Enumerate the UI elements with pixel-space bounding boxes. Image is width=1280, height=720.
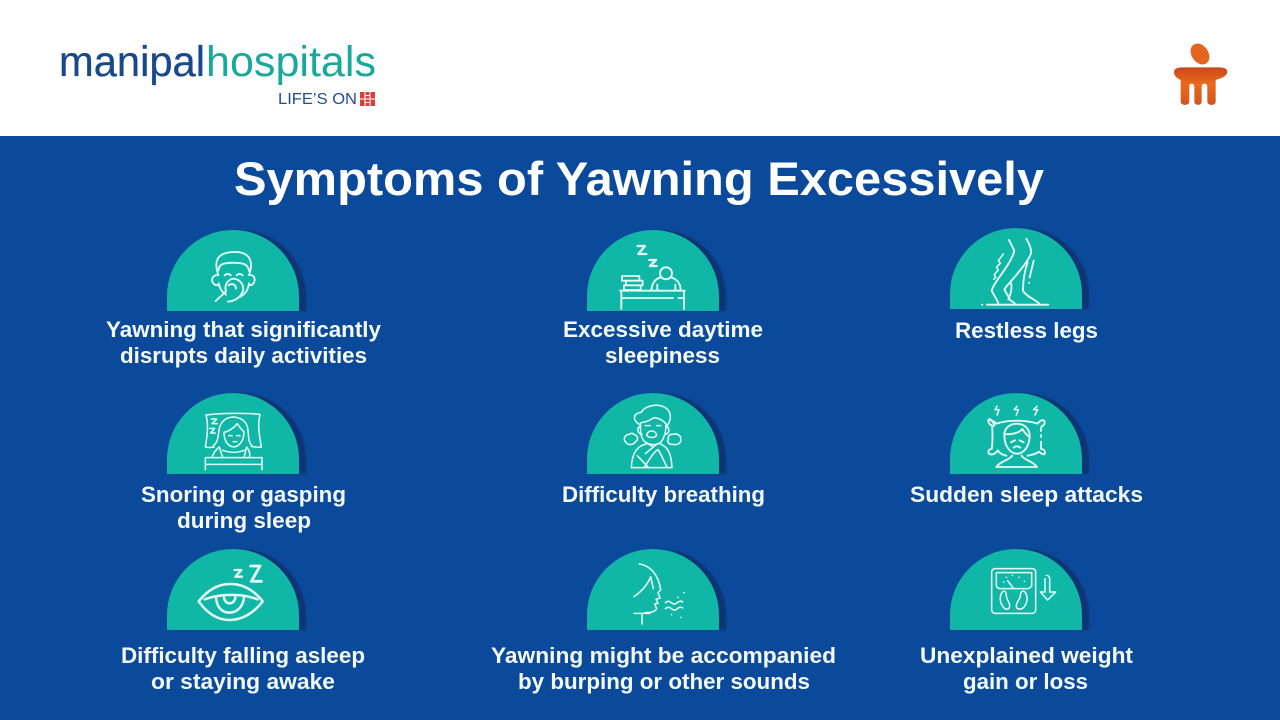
label: during sleep [177, 508, 311, 533]
dome shadow [957, 393, 1089, 474]
label: by burping or other sounds [518, 669, 810, 694]
dome [587, 393, 719, 474]
label: disrupts daily activities [120, 343, 367, 368]
symptom: restless legs [950, 228, 1098, 343]
symptom: snoring or gasping [141, 393, 346, 533]
label: sleepiness [605, 343, 720, 368]
label [563, 317, 763, 368]
icon: legs [982, 239, 1048, 305]
label [141, 482, 346, 533]
dome [950, 549, 1082, 630]
symptom: burping or other sounds [491, 549, 836, 694]
symptom: sudden sleep attacks [910, 393, 1143, 507]
icon: person struggling to breathe [624, 405, 681, 468]
dome [950, 228, 1082, 309]
dome [950, 393, 1082, 474]
logo wordmark: manipal: manipal [59, 39, 205, 86]
label: Unexplained weight [920, 643, 1134, 668]
label: Yawning might be accompanied [491, 643, 836, 668]
label: or staying awake [151, 669, 335, 694]
label: Difficulty breathing [562, 482, 765, 507]
icon: sleepy eye [199, 566, 263, 620]
title: Symptoms of Yawning Excessively [234, 152, 1044, 205]
icon: head on pillow with zaps [988, 406, 1045, 467]
dome [167, 230, 299, 311]
label [121, 643, 365, 694]
symptom: yawning disrupts activities [106, 230, 382, 368]
dome shadow [957, 228, 1089, 309]
logo wordmark: hospitals: hospitals [206, 39, 376, 86]
label: Yawning that significantly [106, 317, 382, 342]
label: gain or loss [963, 669, 1088, 694]
icon: woman sleeping on pillow [205, 413, 262, 470]
logo tagline: LIFE’S ON [278, 91, 357, 108]
dome shadow [957, 549, 1089, 630]
symptom: unexplained weight change [920, 549, 1134, 694]
symptom: excessive daytime sleepiness [563, 230, 763, 368]
dome [167, 549, 299, 630]
icon: person asleep at desk [620, 246, 685, 309]
dome [587, 230, 719, 311]
icon: weighing scale with arrow [992, 569, 1056, 613]
label: Snoring or gasping [141, 482, 346, 507]
dome [167, 393, 299, 474]
logo red cross mark [360, 92, 375, 106]
logo: orange symbol [1174, 40, 1227, 105]
icon: yawning face [212, 252, 255, 302]
label [106, 317, 382, 368]
dome [587, 549, 719, 630]
label: Difficulty falling asleep [121, 643, 365, 668]
dome shadow [174, 393, 306, 474]
label [920, 643, 1134, 694]
label: Sudden sleep attacks [910, 482, 1143, 507]
dome shadow [174, 549, 306, 630]
icon: face profile with sound waves [634, 564, 684, 624]
label: Excessive daytime [563, 317, 763, 342]
dome shadow [594, 393, 726, 474]
label [491, 643, 836, 694]
dome shadow [174, 230, 306, 311]
symptom: difficulty falling asleep [121, 549, 365, 694]
dome shadow [594, 230, 726, 311]
symptom: difficulty breathing [562, 393, 765, 507]
logo: Manipal Hospitals [59, 39, 376, 108]
dome shadow [594, 549, 726, 630]
label: Restless legs [955, 318, 1098, 343]
